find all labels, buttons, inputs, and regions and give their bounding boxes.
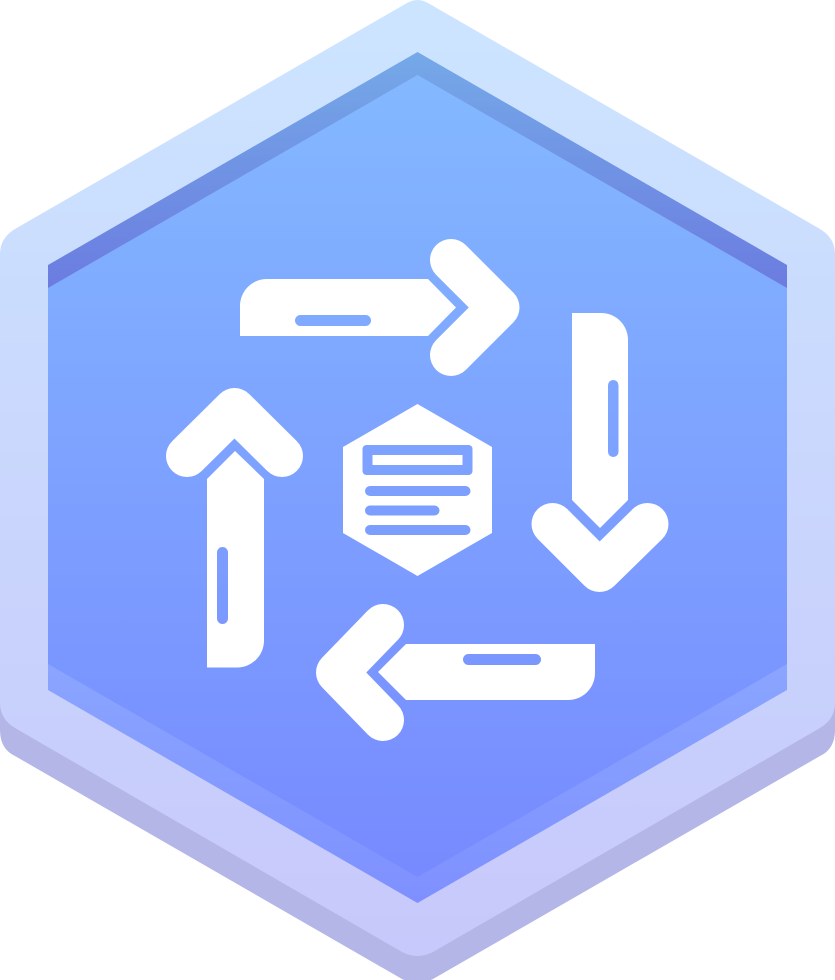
hexagon bottom shadow: [0, 500, 835, 980]
arrow: right, pointing down: [552, 313, 648, 571]
arrow: bottom, pointing left: [337, 625, 595, 720]
arrow: left, pointing up: [187, 409, 282, 668]
arrow: top, pointing right: [240, 260, 498, 355]
top inner shadow band: [48, 52, 787, 400]
bottom inner highlight band: [48, 500, 787, 903]
document line 1: [365, 486, 470, 496]
document line 2: [365, 506, 440, 516]
document line 3: [365, 525, 470, 535]
hexagon blue face: [48, 75, 787, 877]
icon: central hexagon document: [343, 404, 492, 576]
document header box: [362, 445, 472, 475]
